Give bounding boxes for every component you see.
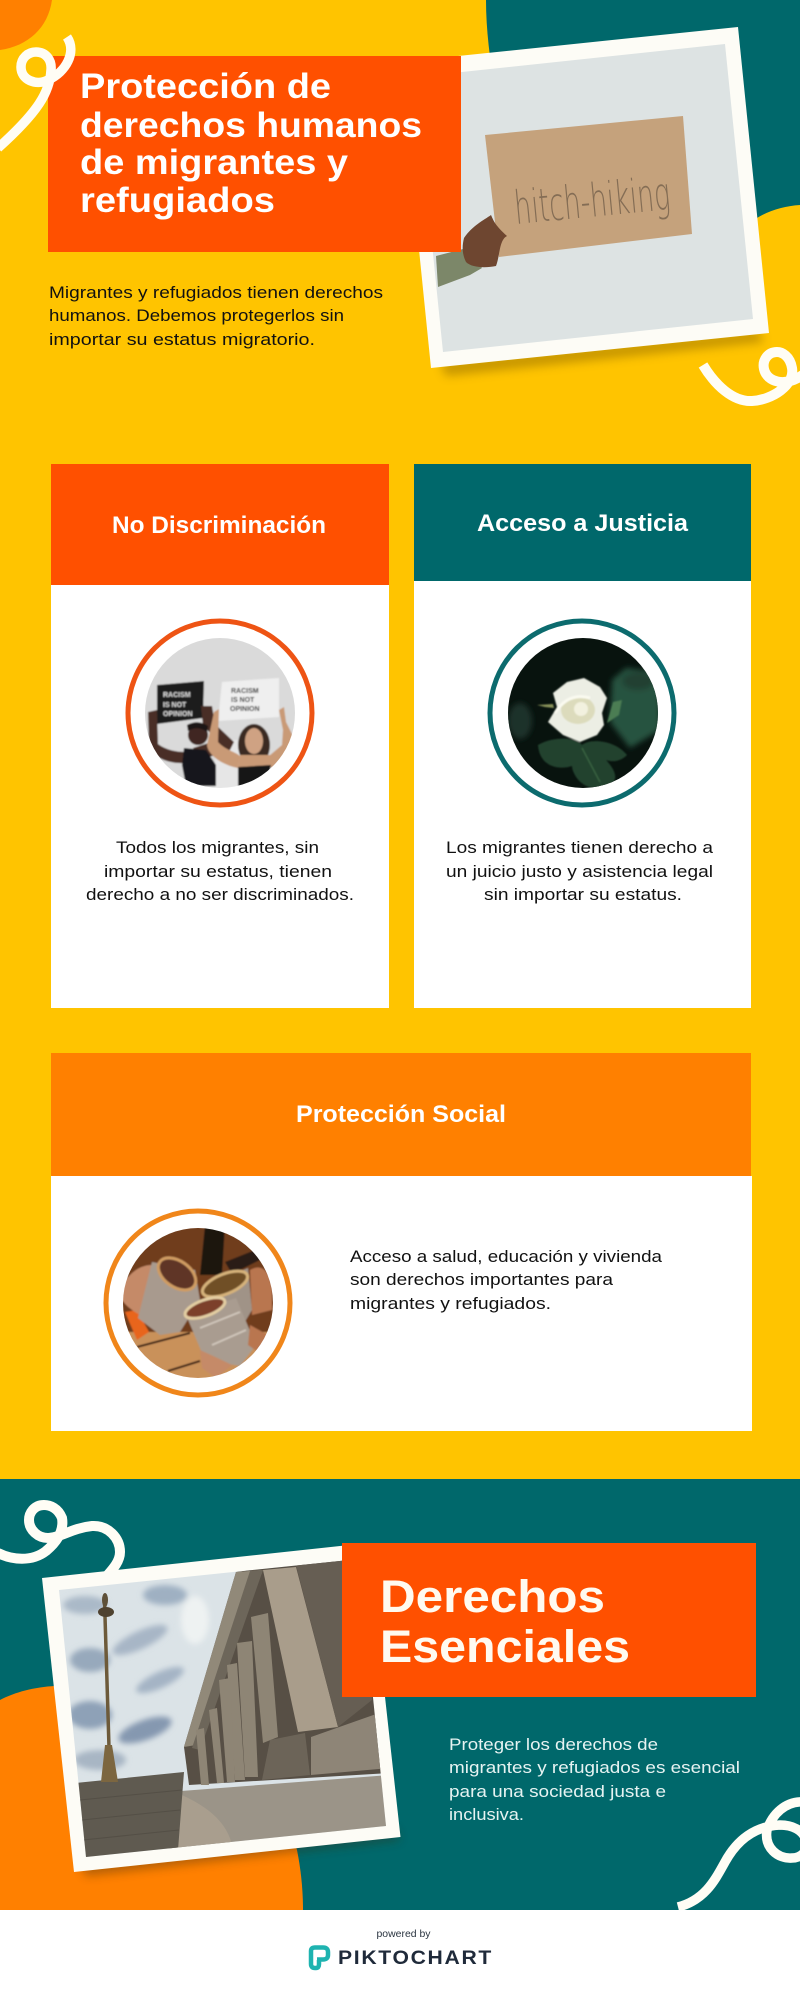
intro text: Migrantes y refugiados tienen derechos: [49, 284, 383, 302]
sign words: [163, 688, 260, 718]
ring: [128, 621, 312, 805]
panel: Derechos Esenciales title: [342, 1543, 756, 1697]
ring: [490, 621, 674, 805]
icon: piktochart logo: [311, 1948, 328, 1968]
sign words: RACISM: [231, 688, 259, 695]
title: refugiados: [80, 181, 275, 220]
body text: Los migrantes tienen derecho a: [446, 839, 714, 857]
teal footer section background: [0, 1479, 800, 1910]
body text: derecho a no ser discriminados.: [86, 886, 354, 904]
yellow background: [0, 0, 800, 1480]
photo: protest signs: [145, 638, 295, 788]
title: derechos humanos: [80, 106, 422, 145]
building: [184, 1555, 390, 1785]
heading: No Discriminación: [112, 512, 326, 539]
panel: No Discriminación: [51, 464, 389, 1008]
sign words: IS NOT: [163, 702, 187, 709]
squiggle: top right: [703, 352, 800, 401]
footer: [0, 1910, 800, 1990]
photo: white rose: [508, 638, 658, 788]
squiggle: section left: [0, 1505, 120, 1578]
closing text: inclusiva.: [449, 1806, 524, 1824]
body text: un juicio justo y asistencia legal: [446, 863, 713, 881]
squiggle: top left: [0, 37, 71, 148]
panel: Acceso a Justicia: [414, 464, 751, 1008]
title: Derechos: [380, 1571, 605, 1622]
powered by: powered by: [376, 1928, 431, 1940]
polaroid photo: hitch-hiking sign: [400, 27, 769, 376]
intro text: humanos. Debemos protegerlos sin: [49, 307, 344, 325]
blob: orange bottom left: [0, 1686, 303, 1910]
sign words: IS NOT: [231, 697, 255, 704]
body text: son derechos importantes para: [350, 1271, 614, 1289]
closing text: Proteger los derechos de: [449, 1736, 658, 1754]
blob: orange top left: [0, 0, 52, 50]
cardboard sign: [485, 116, 692, 257]
sign words: RACISM: [163, 692, 191, 699]
title panel: [48, 56, 461, 252]
sign words: OPINION: [163, 711, 193, 718]
stone wall: [76, 1772, 184, 1860]
closing text: migrantes y refugiados es esencial: [449, 1759, 740, 1777]
sign words: OPINION: [230, 706, 260, 713]
sleeve: [436, 248, 482, 287]
polaroid photo: columned building: [42, 1543, 400, 1876]
body text: Acceso a salud, educación y vivienda: [350, 1248, 663, 1266]
photo: burritos: [123, 1228, 273, 1378]
closing text: para una sociedad justa e: [449, 1783, 666, 1801]
title: Protección de: [80, 67, 331, 106]
blob: teal top right: [486, 0, 800, 218]
ring: [106, 1211, 290, 1395]
title: de migrantes y: [80, 143, 349, 182]
sign text: hitch-hiking: [512, 166, 672, 235]
heading: Protección Social: [296, 1101, 506, 1128]
ground: [168, 1775, 392, 1850]
title: Esenciales: [380, 1621, 630, 1672]
body text: importar su estatus, tienen: [104, 863, 332, 881]
lamp post: [104, 1600, 110, 1780]
hand: [463, 215, 507, 267]
body text: Todos los migrantes, sin: [116, 839, 319, 857]
body text: sin importar su estatus.: [484, 886, 682, 904]
panel: Protección Social: [51, 1053, 752, 1431]
squiggle: section right: [678, 1802, 800, 1907]
heading: Acceso a Justicia: [477, 510, 689, 537]
piktochart wordmark: PIKTOCHART: [338, 1948, 493, 1969]
intro text: importar su estatus migratorio.: [49, 331, 315, 349]
body text: migrantes y refugiados.: [350, 1295, 551, 1313]
